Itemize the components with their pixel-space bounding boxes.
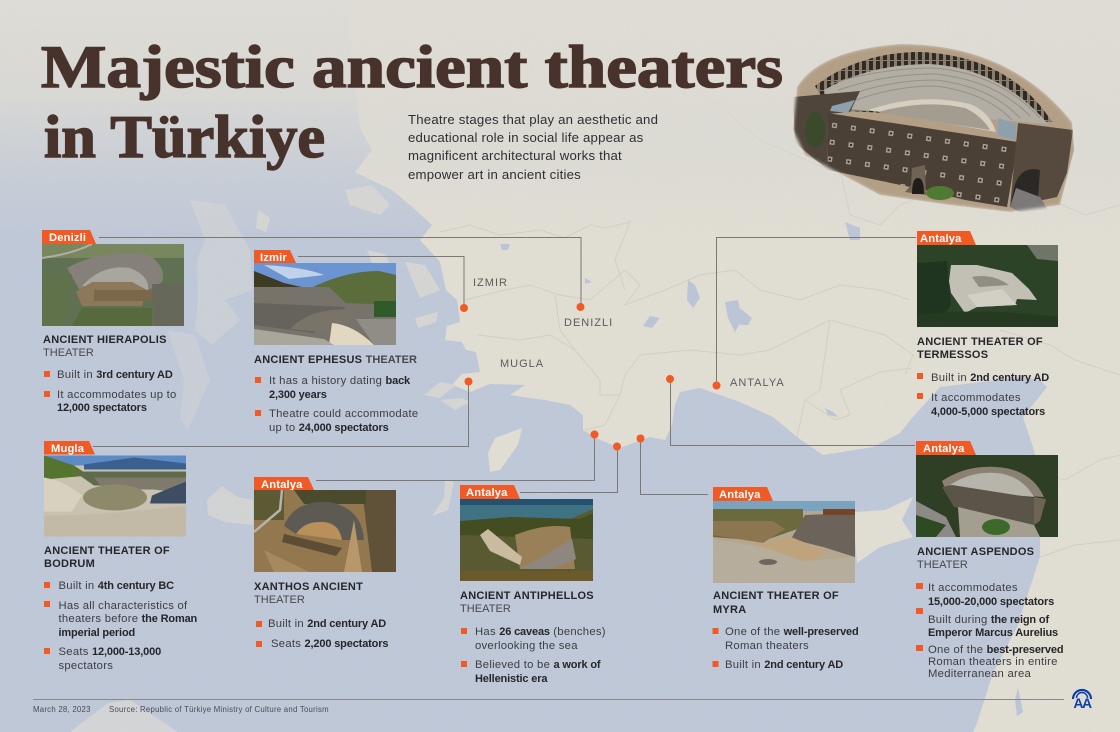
- panel: Aspendos: [916, 441, 1063, 680]
- bullets: [255, 375, 418, 434]
- tag: Antalya: Antalya: [920, 233, 962, 245]
- bullets: [712, 626, 859, 671]
- bullets: theaters before the Roman: [58, 613, 198, 625]
- bullets: It accommodates: [928, 582, 1018, 594]
- bullets: [461, 626, 606, 685]
- map land: Turkey: [345, 0, 1120, 732]
- panel: Antiphellos: [460, 485, 606, 685]
- heading: [460, 590, 594, 615]
- bullets: It has a history dating back: [269, 375, 411, 387]
- bullets: Built in 2nd century AD: [931, 372, 1049, 384]
- map city labels: IZMIR: [473, 277, 508, 289]
- heading: [917, 336, 1043, 361]
- heading: ANCIENT ASPENDOS: [917, 546, 1034, 558]
- footer: Source: Republic of Türkiye Ministry of Culture and Tourism: [109, 705, 329, 714]
- title: Majestic ancient theaters: [41, 34, 783, 100]
- tag: Mugla: Mugla: [51, 443, 85, 455]
- photo: Aspendos theater: [916, 455, 1058, 537]
- heading: THEATER: [43, 347, 94, 359]
- photo: Myra theater: [713, 501, 855, 583]
- map land: Cyprus: [855, 497, 913, 563]
- bullets: Seats 2,200 spectators: [271, 638, 388, 650]
- bullets: [44, 369, 177, 414]
- bullets: Theatre could accommodate: [269, 408, 418, 420]
- heading: [44, 545, 170, 570]
- footer: [33, 699, 1064, 714]
- bullets: Roman theaters in entire: [928, 656, 1058, 668]
- heading: ANCIENT EPHESUS THEATER: [254, 354, 417, 366]
- bullets: One of the well-preserved: [725, 626, 859, 638]
- tag: Izmir: [254, 250, 296, 264]
- map land: North Africa: [70, 700, 178, 732]
- photo: Antiphellos theater: [460, 499, 593, 581]
- tag: Antalya: Antalya: [261, 479, 303, 491]
- heading: [917, 546, 1034, 571]
- tag: Denizli: [42, 230, 96, 244]
- connector lines and map markers: [93, 238, 916, 494]
- bullets: Built in 3rd century AD: [57, 369, 173, 381]
- bullets: Built in 4th century BC: [58, 580, 174, 592]
- heading: ANCIENT HIERAPOLIS: [43, 334, 167, 346]
- photo: Termessos theater: [917, 245, 1058, 327]
- intro text: educational role in social life appear as: [408, 130, 644, 145]
- heading: XANTHOS ANCIENT: [254, 581, 363, 593]
- bullets: Has all characteristics of: [58, 600, 188, 612]
- map lakes: [500, 222, 1023, 716]
- heading: THEATER: [917, 559, 968, 571]
- bullets: [916, 582, 1063, 680]
- bullets: 2,300 years: [269, 389, 327, 401]
- tag: Antalya: Antalya: [719, 489, 761, 501]
- hero photo: Aspendos theater: [793, 44, 1074, 212]
- intro text: Theatre stages that play an aesthetic and: [408, 112, 658, 127]
- title: in Türkiye: [44, 104, 325, 170]
- icon: AA logo: [1073, 690, 1092, 711]
- bullets: spectators: [58, 660, 113, 672]
- bullets: One of the best-preserved: [928, 644, 1063, 656]
- tag: Antalya: Antalya: [923, 443, 965, 455]
- heading: [254, 581, 363, 606]
- bullets: 4,000-5,000 spectators: [931, 406, 1045, 418]
- bullets: Hellenistic era: [475, 673, 548, 685]
- tag: Antalya: [916, 441, 976, 455]
- photo: Hierapolis theater: [42, 244, 184, 326]
- tag: Antalya: [917, 231, 976, 245]
- bullets: [917, 372, 1049, 418]
- bullets: Seats 12,000-13,000: [58, 646, 161, 658]
- bullets: Built in 2nd century AD: [268, 618, 386, 630]
- heading: ANCIENT THEATER OF: [44, 545, 170, 557]
- bullets: up to 24,000 spectators: [269, 422, 389, 434]
- panel: Xanthos: [254, 477, 396, 650]
- bullets: Built in 2nd century AD: [725, 659, 843, 671]
- heading: BODRUM: [44, 558, 95, 570]
- tag: Antalya: [460, 485, 520, 499]
- bullets: 12,000 spectators: [57, 402, 147, 414]
- heading: [713, 590, 839, 616]
- bullets: Believed to be a work of: [475, 659, 601, 671]
- bullets: Roman theaters: [725, 640, 809, 652]
- top haze: [0, 0, 1120, 240]
- photo: Ephesus theater: [254, 263, 396, 345]
- heading: ANCIENT THEATER OF: [713, 590, 839, 602]
- panel: Myra: [712, 487, 859, 671]
- panel: Ephesus: [254, 250, 418, 434]
- bullets: 15,000-20,000 spectators: [928, 596, 1054, 608]
- heading: ANCIENT ANTIPHELLOS: [460, 590, 594, 602]
- bullets: [256, 618, 388, 650]
- map inner borders: [440, 0, 1120, 557]
- panel: Hierapolis: [42, 230, 184, 414]
- panel: Termessos: [917, 231, 1058, 418]
- map city labels: MUGLA: [500, 358, 544, 370]
- heading: TERMESSOS: [917, 349, 988, 361]
- heading: THEATER: [254, 594, 305, 606]
- title: [41, 34, 783, 170]
- heading: MYRA: [713, 604, 746, 616]
- bullets: Has 26 caveas (benches): [475, 626, 606, 638]
- tag: Antalya: [713, 487, 773, 501]
- panel: Bodrum: [44, 441, 198, 672]
- tag: Denizli: Denizli: [49, 232, 86, 244]
- map city labels: ANTALYA: [730, 377, 785, 389]
- bullets: It accommodates: [931, 392, 1021, 404]
- icon: AA logo: AA: [1073, 695, 1092, 711]
- map land: Rhodes: [488, 428, 522, 472]
- intro text: magnificent architectural works that: [408, 148, 622, 163]
- bullets: It accommodates up to: [57, 389, 177, 401]
- bullets: imperial period: [58, 627, 135, 639]
- photo: Xanthos theater: [254, 490, 396, 572]
- heading: ANCIENT THEATER OF: [917, 336, 1043, 348]
- bullets: [44, 580, 198, 672]
- map land: Greek mainland: [190, 200, 253, 345]
- tag: Izmir: Izmir: [260, 252, 287, 264]
- heading: [43, 334, 167, 359]
- intro text: empower art in ancient cities: [408, 167, 581, 182]
- photo: Bodrum theater: [44, 456, 186, 536]
- heading: THEATER: [460, 603, 511, 615]
- map land: Aegean islands: [256, 185, 470, 516]
- tag: Antalya: Antalya: [466, 487, 508, 499]
- map city labels: [473, 277, 785, 389]
- map city labels: DENIZLI: [564, 317, 613, 329]
- bullets: Mediterranean area: [928, 668, 1032, 680]
- footer: March 28, 2023: [33, 705, 91, 714]
- bullets: Built during the reign of: [928, 614, 1049, 626]
- tag: Mugla: [44, 441, 95, 455]
- bullets: Emperor Marcus Aurelius: [928, 627, 1058, 639]
- map land: Crete: [207, 486, 253, 525]
- bullets: overlooking the sea: [475, 640, 578, 652]
- tag: Antalya: [254, 477, 314, 491]
- intro text: [408, 112, 658, 182]
